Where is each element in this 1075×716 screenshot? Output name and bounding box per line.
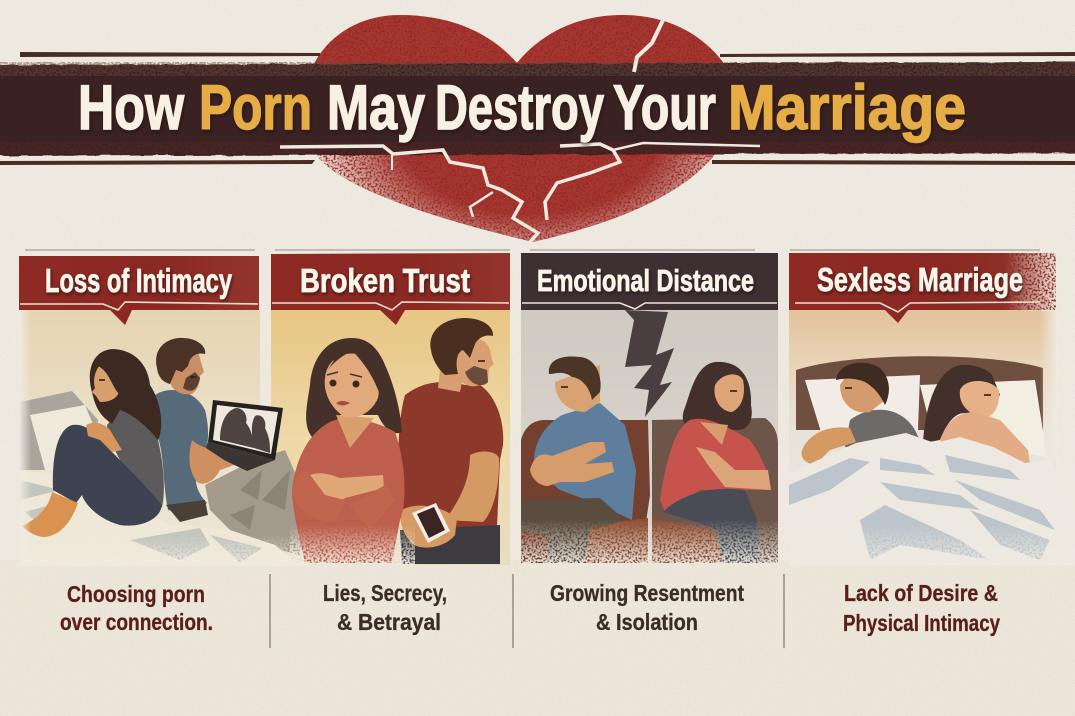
banner: sexless marriage [789, 253, 1057, 323]
bed [19, 470, 300, 566]
banner: emotional distance [521, 253, 778, 310]
title: Marriage [728, 73, 966, 143]
caption: choosing porn [60, 581, 213, 635]
heart speckled fade [317, 155, 714, 242]
caption: choosing porn: Choosing porn [67, 581, 205, 607]
panel: sexless marriage [789, 310, 1075, 567]
fade [31, 538, 306, 566]
pillows [805, 375, 1047, 457]
caption: lies: Lies, Secrecy, [323, 580, 447, 606]
panel background: broken trust [271, 310, 510, 565]
title: Your [613, 73, 716, 143]
title: Porn [199, 73, 312, 143]
caption: lies [323, 580, 447, 635]
man [802, 363, 922, 465]
banner: emotional distance: Emotional Distance [537, 263, 754, 298]
gray blanket [205, 450, 305, 555]
panel: broken trust [290, 318, 503, 565]
man arms crossed [521, 356, 636, 563]
caption: desire: Lack of Desire & [844, 580, 998, 606]
panel: loss of intimacy [19, 310, 309, 567]
blanket [789, 433, 1075, 566]
headboard [796, 356, 1043, 430]
lightning bolt [625, 310, 674, 417]
title: May [327, 73, 425, 143]
sofa [521, 418, 778, 563]
panel: emotional distance [521, 310, 778, 565]
caption: lies: & Betrayal [337, 609, 441, 635]
caption: choosing porn: over connection. [60, 609, 213, 635]
broken heart [305, 15, 735, 245]
banner: loss of intimacy [19, 256, 259, 325]
caption: resentment [550, 580, 744, 635]
title: Destroy [435, 73, 604, 143]
caption: desire [843, 580, 1000, 636]
banner: broken trust: Broken Trust [300, 262, 470, 299]
man [155, 338, 243, 522]
woman arms crossed [660, 362, 771, 563]
heart cracks [280, 18, 760, 242]
banner: loss of intimacy: Loss of Intimacy [45, 262, 232, 299]
woman arms crossed [292, 338, 405, 563]
title: How [78, 73, 185, 143]
title [78, 73, 966, 143]
title band [0, 52, 1075, 165]
pillows [20, 391, 98, 470]
banner: broken trust [271, 253, 510, 325]
woman [22, 349, 164, 537]
caption: resentment: Growing Resentment [550, 580, 744, 606]
woman [923, 365, 1030, 465]
caption: desire: Physical Intimacy [843, 610, 1000, 636]
laptop [206, 400, 283, 471]
caption: resentment: & Isolation [596, 609, 698, 635]
man with phone behind back [398, 318, 503, 564]
